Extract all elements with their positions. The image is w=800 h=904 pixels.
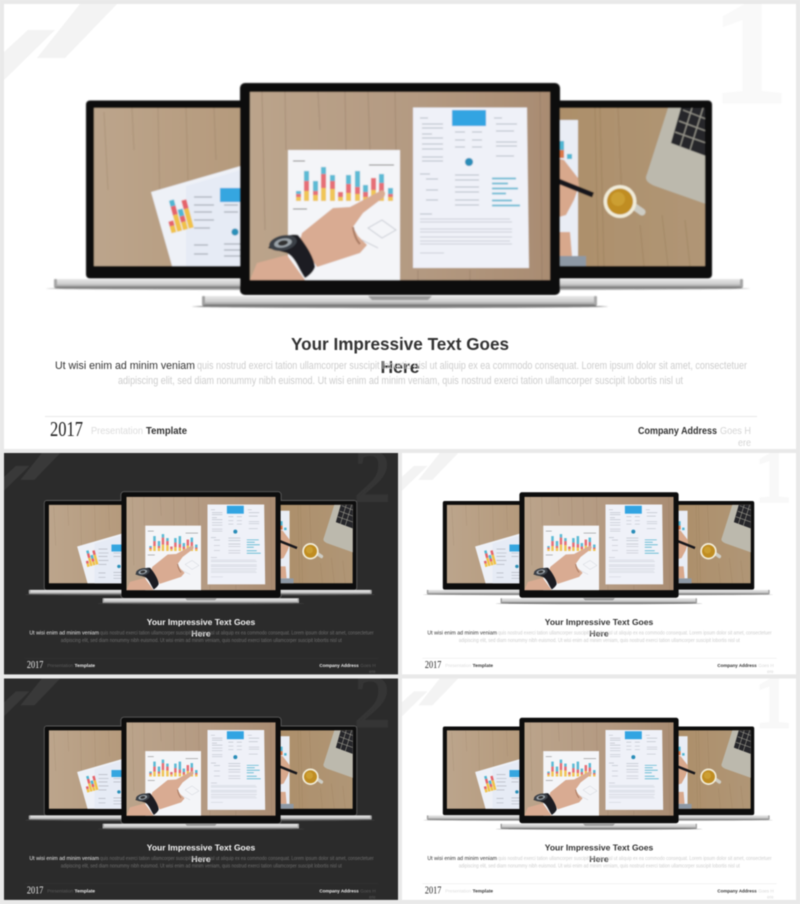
- laptops mockup: [423, 492, 773, 604]
- body text: [427, 856, 772, 870]
- footer right: Company Address: [638, 426, 717, 437]
- heading: [545, 843, 653, 864]
- decorative corner stripes: [402, 453, 458, 491]
- footer left: Template: [146, 426, 187, 437]
- footer right: [717, 663, 774, 675]
- footer left: Presentation: [445, 888, 471, 894]
- big slide number: 1: [755, 435, 792, 517]
- laptops mockup: [25, 492, 375, 604]
- heading: Here: [589, 629, 609, 639]
- footer right: [717, 888, 774, 900]
- footer left: 2017: [27, 660, 43, 671]
- footer left: Presentation: [445, 663, 471, 669]
- footer right: Company Address: [717, 663, 757, 669]
- laptops mockup: [25, 718, 375, 830]
- footer left: [50, 417, 187, 441]
- footer right: ere: [767, 669, 774, 675]
- body text: quis nostrud exerci tation ullamcorper suscipit lobortis nisl ut aliquip ex ea commodo consequat. Lorem ipsum dolor sit amet, consectetuer: [100, 631, 374, 637]
- heading: [291, 334, 509, 377]
- footer left: Presentation: [47, 888, 73, 894]
- footer left: [27, 660, 95, 671]
- footer right: Company Address: [319, 888, 359, 894]
- footer left: Template: [473, 888, 493, 894]
- body text: quis nostrud exerci tation ullamcorper suscipit lobortis nisl ut aliquip ex ea commodo consequat. Lorem ipsum dolor sit amet, consectetuer: [100, 856, 374, 862]
- heading: Your Impressive Text Goes: [545, 617, 653, 627]
- heading: [147, 843, 255, 864]
- footer left: Template: [75, 888, 95, 894]
- panel: small white slide top: [402, 435, 796, 675]
- heading: Here: [191, 629, 211, 639]
- big slide number: 2: [354, 660, 391, 742]
- body text: adipiscing elit, sed diam nonummy nibh euismod. Ut wisi enim ad minim veniam, quis nostrud exerci tation ullamcorper suscipit lobortis nisl ut: [118, 375, 683, 387]
- footer right: ere: [369, 669, 376, 675]
- footer right: [638, 426, 751, 449]
- body text: adipiscing elit, sed diam nonummy nibh euismod. Ut wisi enim ad minim veniam, quis nostrud exerci tation ullamcorper suscipit lobortis nisl ut: [459, 864, 740, 870]
- footer left: Presentation: [47, 663, 73, 669]
- body text: [29, 631, 374, 644]
- footer right: Goes H: [758, 888, 774, 894]
- footer right: ere: [369, 894, 376, 900]
- heading: Your Impressive Text Goes: [291, 334, 509, 354]
- heading: Here: [589, 854, 609, 864]
- body text: Ut wisi enim ad minim veniam: [29, 856, 99, 862]
- laptop outlines: [44, 492, 357, 598]
- footer left: 2017: [27, 885, 43, 896]
- footer right: ere: [738, 438, 751, 449]
- heading: Your Impressive Text Goes: [147, 843, 255, 853]
- footer right: Company Address: [717, 888, 757, 894]
- footer right: [319, 888, 376, 900]
- footer right: Goes H: [360, 663, 376, 669]
- body text: adipiscing elit, sed diam nonummy nibh euismod. Ut wisi enim ad minim veniam, quis nostrud exerci tation ullamcorper suscipit lobortis nisl ut: [459, 638, 740, 644]
- decorative corner stripes: [4, 453, 60, 491]
- heading: Your Impressive Text Goes: [147, 617, 255, 627]
- footer left: Template: [473, 663, 493, 669]
- decorative corner stripes: [402, 678, 458, 716]
- body text: [29, 856, 374, 870]
- decorative corner stripes: [4, 4, 117, 80]
- body text: Ut wisi enim ad minim veniam: [427, 856, 497, 862]
- body text: [55, 360, 747, 387]
- laptops mockup: [423, 718, 773, 830]
- footer right: Goes H: [720, 426, 751, 437]
- panel: small dark slide bottom: [4, 660, 398, 900]
- footer right: ere: [767, 894, 774, 900]
- body text: Ut wisi enim ad minim veniam: [29, 631, 99, 637]
- panel: small white slide bottom: [402, 660, 796, 900]
- footer left: [425, 660, 493, 671]
- body text: adipiscing elit, sed diam nonummy nibh euismod. Ut wisi enim ad minim veniam, quis nostrud exerci tation ullamcorper suscipit lobortis nisl ut: [61, 638, 342, 644]
- body text: [427, 631, 772, 644]
- footer left: Presentation: [91, 426, 143, 437]
- heading: Your Impressive Text Goes: [545, 843, 653, 853]
- heading: [545, 617, 653, 639]
- heading: Here: [380, 357, 420, 377]
- panel: small dark slide top: [4, 435, 398, 675]
- big slide number: 2: [354, 435, 391, 517]
- footer left: [27, 885, 95, 896]
- footer left: 2017: [50, 417, 83, 441]
- heading: [147, 617, 255, 639]
- laptops mockup: [46, 83, 750, 308]
- footer right: Goes H: [758, 663, 774, 669]
- body text: Ut wisi enim ad minim veniam: [55, 360, 195, 372]
- footer right: Company Address: [319, 663, 359, 669]
- decorative corner stripes: [4, 678, 60, 716]
- body text: Ut wisi enim ad minim veniam: [427, 631, 497, 637]
- body text: adipiscing elit, sed diam nonummy nibh euismod. Ut wisi enim ad minim veniam, quis nostrud exerci tation ullamcorper suscipit lobortis nisl ut: [61, 864, 342, 870]
- footer left: [425, 885, 493, 896]
- footer right: Goes H: [360, 888, 376, 894]
- footer right: [319, 663, 376, 675]
- big slide number: 1: [755, 660, 792, 742]
- heading: Here: [191, 854, 211, 864]
- footer left: Template: [75, 663, 95, 669]
- footer left: 2017: [425, 660, 441, 671]
- panel: large white slide: [4, 0, 796, 449]
- footer left: 2017: [425, 885, 441, 896]
- laptop outlines: [44, 717, 357, 824]
